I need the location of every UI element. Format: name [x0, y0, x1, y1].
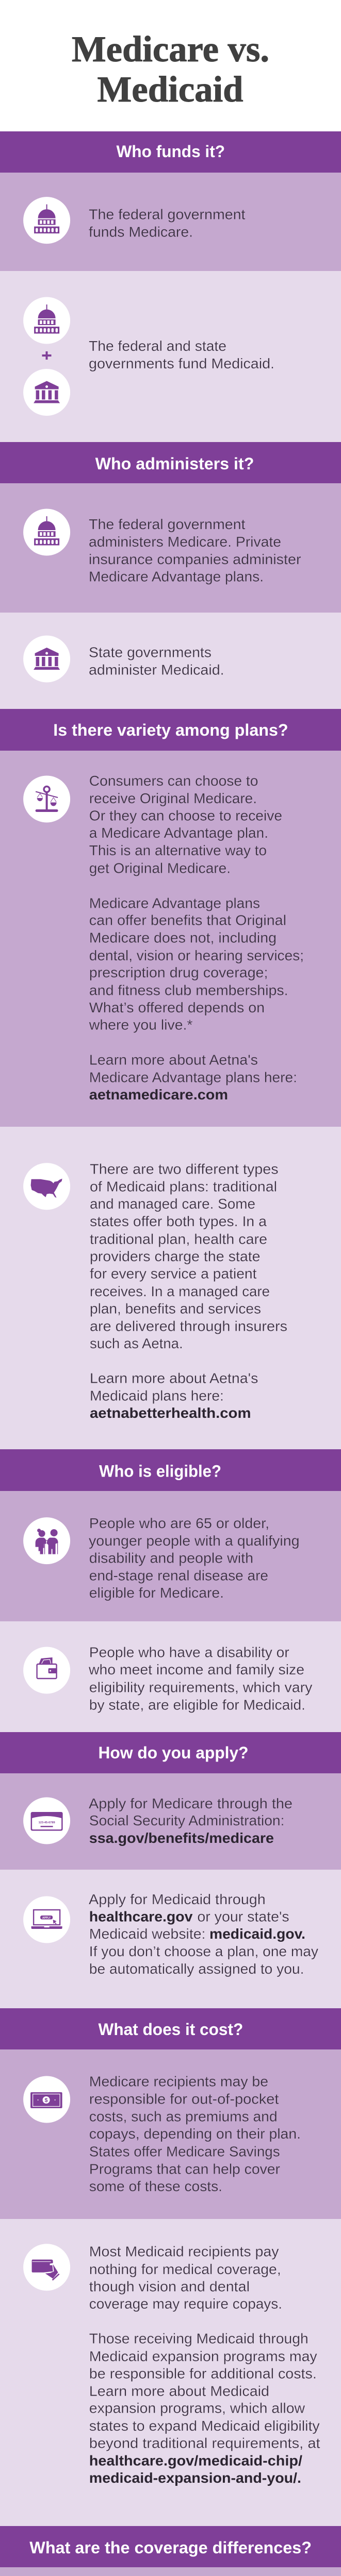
text: state administration: State governments [89, 644, 212, 660]
icon: banknote: $ [45, 2097, 48, 2104]
text: Medicare cost [89, 2073, 301, 2194]
text: Medicare cost: responsible for out-of-pocket [89, 2091, 279, 2107]
section: who funds it [0, 131, 341, 442]
text: Medicaid expansion: Learn more about Medicaid [89, 2383, 269, 2399]
text: Medicaid expansion: expansion programs, which allow [89, 2400, 305, 2416]
heading: coverage differences: What are the coverage differences? [29, 2538, 312, 2557]
panel: Medicaid cost [0, 2219, 341, 2526]
text: Medicaid plan types: There are two different types [90, 1161, 279, 1177]
panel: Medicare cost [0, 2049, 341, 2219]
section: who is eligible [0, 1449, 341, 1732]
text: Medicaid cost [89, 2244, 282, 2312]
text: Medicare cost: some of these costs. [89, 2178, 222, 2194]
text: Medicare eligibility: younger people with a qualifying [89, 1533, 299, 1549]
text: Medicaid plan types: providers charge the state [90, 1248, 261, 1264]
heading: how do you apply: How do you apply? [98, 1743, 249, 1762]
icon: card in hand [23, 2244, 70, 2291]
text: Medicare Advantage benefits: prescription drug coverage; [89, 964, 268, 980]
text: Aetna Medicare link: aetnamedicare.com [89, 1087, 228, 1103]
text: Medicare choices [89, 773, 282, 876]
text: Medicare choices: This is an alternative way to [89, 842, 267, 858]
text: Medicare Advantage benefits: Medicare does not, including [89, 930, 277, 946]
text: Medicaid expansion: be responsible for additional costs. [89, 2366, 317, 2381]
text: joint funding: governments fund Medicaid. [89, 355, 274, 371]
heading: variety among plans [0, 709, 341, 751]
text: apply for Medicaid: If you don’t choose a plan, one may [89, 1943, 318, 1959]
panel: Medicare plan variety [0, 751, 341, 1127]
text: Medicare cost: costs, such as premiums and [89, 2109, 278, 2125]
text: Medicaid eligibility [88, 1645, 312, 1713]
text: Medicaid plan types: plan, benefits and services [90, 1301, 261, 1317]
text: federal administration: administers Medicare. Private [89, 534, 281, 550]
text: Medicare eligibility [89, 1515, 299, 1601]
icon: plus [42, 351, 52, 360]
text: federal administration: The federal government [89, 516, 246, 532]
text: federal administration: insurance companies administer [89, 551, 301, 567]
text: Medicaid eligibility: who meet income and family size [88, 1662, 304, 1677]
text: Medicaid expansion: Those receiving Medicaid through [89, 2331, 308, 2347]
heading: how do you apply [0, 1732, 341, 1773]
text: Aetna Medicare link: Medicare Advantage plans here: [89, 1070, 297, 1086]
text: federal funding [89, 206, 246, 240]
text: apply for Medicare [89, 1795, 293, 1846]
text: Medicaid cost: coverage may require copays. [89, 2296, 282, 2312]
icon: elderly couple [23, 1517, 70, 1564]
panel: federal and state fund Medicaid [0, 271, 341, 442]
icon: banknote [23, 2076, 70, 2123]
text: Medicaid plan types: are delivered through insurers [90, 1318, 287, 1334]
text: Medicare choices: Or they can choose to receive [89, 808, 282, 824]
text: apply for Medicaid: healthcare.gov [89, 1908, 193, 1925]
text: Medicaid plan types: traditional plan, health care [90, 1231, 267, 1247]
panel: apply for Medicaid [0, 1870, 341, 2008]
text: Medicare Advantage benefits [89, 895, 304, 1033]
heading: what does it cost [0, 2008, 341, 2049]
text: Medicare eligibility: People who are 65 or older, [89, 1515, 269, 1531]
text: Medicare eligibility: eligible for Medicare. [89, 1585, 224, 1601]
text: Medicaid expansion: healthcare.gov/medicaid-chip/ [89, 2453, 302, 2469]
icon: laptop: APPLY [42, 1917, 51, 1920]
text: Medicaid plan types: states offer both types. In a [90, 1213, 267, 1229]
text: Medicaid expansion: Medicaid expansion programs may [89, 2348, 317, 2364]
text: Medicaid cost: Most Medicaid recipients pay [89, 2244, 279, 2260]
icon: capitol [23, 197, 70, 244]
text: apply for Medicare: ssa.gov/benefits/medicare [89, 1830, 274, 1846]
text: Medicaid expansion: medicaid-expansion-and-you/. [89, 2470, 301, 2486]
icon: US map [23, 1163, 70, 1210]
heading: coverage differences [0, 2526, 341, 2567]
text: Medicare Advantage benefits: where you live.* [89, 1017, 193, 1033]
heading: who is eligible [0, 1449, 341, 1491]
panel: Medicaid administration [0, 613, 341, 709]
icon: capitol [23, 297, 70, 344]
icon: scales [23, 776, 70, 822]
text: state administration: administer Medicaid. [89, 662, 224, 678]
text: Medicare Advantage benefits: and fitness club memberships. [89, 982, 288, 998]
section: who administers it [0, 442, 341, 709]
text: apply for Medicare: Apply for Medicare through the [89, 1795, 293, 1811]
heading: who administers it [0, 442, 341, 483]
text: Medicare cost: Medicare recipients may be [89, 2073, 268, 2089]
text: Medicaid expansion: states to expand Medicaid eligibility [89, 2418, 320, 2434]
icon: social security card: 123-45-6789 [39, 1821, 55, 1824]
text: Medicaid plan types: for every service a patient [90, 1266, 257, 1282]
title: Medicaid [97, 70, 243, 110]
heading: who funds it: Who funds it? [117, 142, 225, 161]
text: Aetna Medicaid link: aetnabetterhealth.com [90, 1405, 251, 1421]
panel: apply for Medicare [0, 1773, 341, 1870]
icon: wallet [23, 1647, 70, 1694]
text: Medicaid eligibility: by state, are eligible for Medicaid. [89, 1697, 305, 1713]
text: federal funding: funds Medicare. [89, 224, 193, 240]
section: what does it cost [0, 2008, 341, 2526]
text: apply for Medicaid: be automatically assigned to you. [89, 1961, 304, 1977]
text: Medicare Advantage benefits: dental, vision or hearing services; [89, 947, 304, 963]
text: federal funding: The federal government [89, 206, 246, 223]
section: coverage differences [0, 2526, 341, 2576]
panel: Medicaid eligibility [0, 1621, 341, 1732]
panel: federal funds Medicare [0, 173, 341, 271]
text: state administration [89, 644, 224, 678]
text: apply for Medicaid: or your state's [197, 1908, 289, 1925]
text: Medicaid cost: though vision and dental [89, 2278, 250, 2294]
title: Medicare vs. [72, 29, 269, 70]
text: Medicaid plan types: receives. In a managed care [90, 1283, 270, 1299]
icon: capitol [23, 509, 70, 555]
text: Medicaid eligibility: eligibility requirements, which vary [89, 1680, 312, 1695]
text: apply for Medicaid: Medicaid website: [89, 1926, 205, 1942]
text: Medicare choices: a Medicare Advantage plan. [89, 825, 268, 841]
text: Aetna Medicare link: Learn more about Aetna's [89, 1052, 258, 1067]
text: Medicare cost: copays, depending on their plan. [89, 2126, 301, 2142]
text: Medicare cost: Programs that can help cover [89, 2161, 280, 2177]
panel: Medicare coverage [0, 2567, 341, 2576]
text: Medicare eligibility: end-stage renal disease are [89, 1568, 268, 1584]
text: Medicaid expansion [89, 2331, 320, 2486]
heading: who is eligible: Who is eligible? [99, 1462, 221, 1481]
text: Medicaid expansion: beyond traditional requirements, at [89, 2435, 320, 2451]
text: Medicare choices: Consumers can choose to [89, 773, 258, 789]
text: Medicaid plan types: such as Aetna. [90, 1335, 183, 1351]
section: variety among plans [0, 709, 341, 1449]
text: Medicare eligibility: disability and people with [89, 1550, 253, 1566]
icon: laptop [23, 1896, 70, 1943]
heading: who administers it: Who administers it? [95, 454, 254, 473]
text: Medicaid plan types: and managed care. Some [90, 1196, 255, 1212]
text: Aetna Medicaid link: Medicaid plans here: [90, 1388, 224, 1404]
title [72, 29, 269, 110]
text: joint funding [89, 338, 274, 371]
heading: who funds it [0, 131, 341, 173]
text: apply for Medicaid: medicaid.gov. [209, 1926, 305, 1942]
text: federal administration: Medicare Advantage plans. [89, 569, 264, 584]
text: Aetna Medicaid link [90, 1370, 258, 1421]
text: Medicaid cost: nothing for medical coverage, [89, 2261, 281, 2277]
icon: state building [23, 369, 70, 416]
text: apply for Medicaid [89, 1891, 318, 1977]
text: federal administration [89, 516, 301, 584]
panel: Medicare administration [0, 483, 341, 613]
text: Medicare choices: receive Original Medicare. [89, 790, 257, 806]
text: Aetna Medicare link [89, 1052, 297, 1103]
text: apply for Medicaid: Apply for Medicaid through [89, 1891, 266, 1907]
text: Aetna Medicaid link: Learn more about Aetna's [90, 1370, 258, 1386]
text: Medicare cost: States offer Medicare Savings [89, 2143, 280, 2159]
heading: variety among plans: Is there variety among plans? [53, 721, 288, 739]
icon: state building [23, 636, 70, 682]
icon: social security card [23, 1797, 70, 1844]
section: how do you apply [0, 1732, 341, 2008]
text: Medicare choices: get Original Medicare. [89, 860, 231, 876]
text: apply for Medicare: Social Security Administration: [89, 1812, 284, 1828]
panel: Medicaid plan variety [0, 1127, 341, 1449]
text: Medicare Advantage benefits: Medicare Advantage plans [89, 895, 260, 911]
text: joint funding: The federal and state [89, 338, 226, 354]
heading: what does it cost: What does it cost? [98, 2020, 243, 2039]
text: Medicaid plan types: of Medicaid plans: traditional [90, 1179, 277, 1194]
text: Medicaid plan types [90, 1161, 287, 1351]
panel: Medicare eligibility [0, 1491, 341, 1621]
text: Medicare Advantage benefits: What’s offered depends on [89, 999, 265, 1015]
text: Medicare Advantage benefits: can offer benefits that Original [89, 912, 286, 928]
text: Medicaid eligibility: People who have a disability or [89, 1645, 289, 1660]
